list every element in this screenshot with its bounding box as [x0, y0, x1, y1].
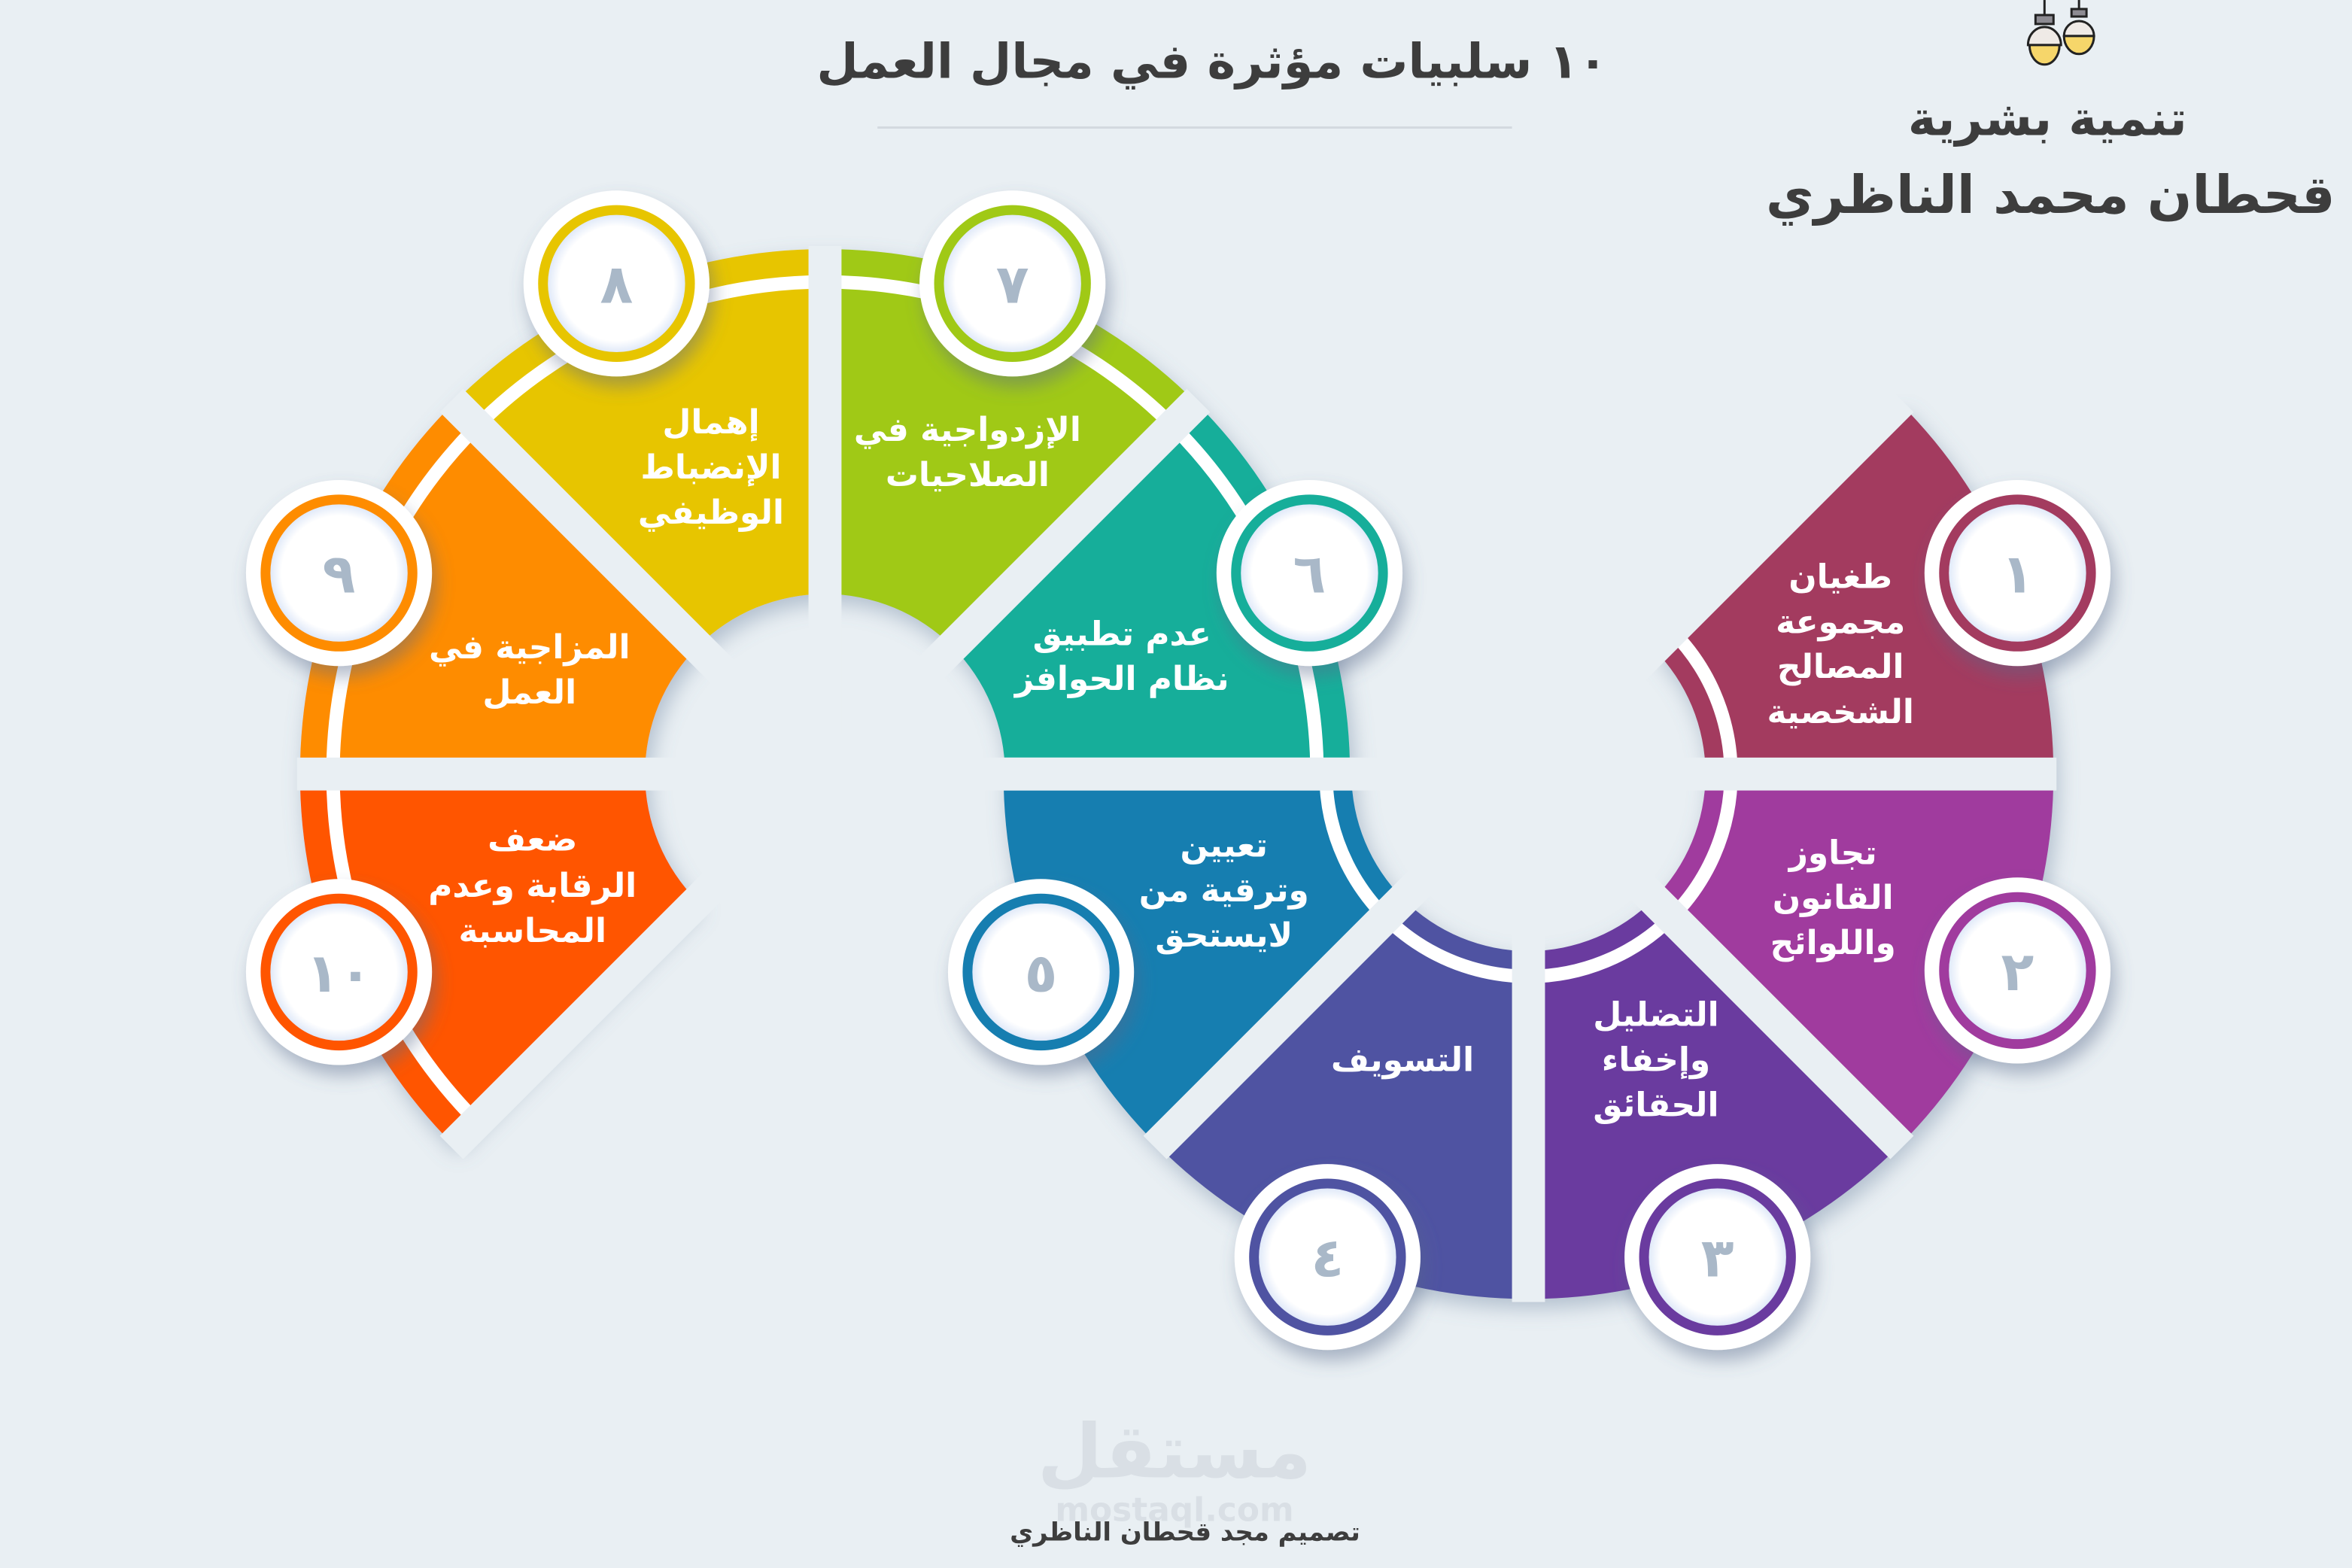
- label 6: نظام الحوافز: [1013, 660, 1229, 698]
- watermark: mostaql.com: [1055, 1491, 1294, 1530]
- segment 3: [1529, 899, 1900, 1299]
- badge 7: ٧: [996, 253, 1029, 316]
- label 3: التضليل: [1593, 996, 1719, 1035]
- label 9: المزاجية في: [429, 628, 631, 667]
- brand text: تنمية بشرية: [1908, 91, 2187, 147]
- segment 9: [300, 403, 697, 774]
- badge 9: ٩: [323, 542, 355, 606]
- label 3: وإخفاء: [1602, 1041, 1710, 1079]
- label 5: لايستحق: [1155, 916, 1293, 955]
- label 2: القانون: [1773, 879, 1894, 917]
- label 8: الوظيفي: [638, 494, 784, 532]
- badge 5: ٥: [1025, 941, 1057, 1004]
- label 1: مجموعة: [1776, 603, 1905, 641]
- badge 9: [246, 480, 432, 666]
- badge 6: ٦: [1293, 542, 1326, 606]
- badge 1: ١: [2001, 542, 2034, 606]
- label 10: المحاسبة: [458, 912, 606, 950]
- badge 1: [1925, 480, 2110, 666]
- label 7: الصلاحيات: [886, 456, 1050, 494]
- icon: lamps: [2028, 0, 2094, 65]
- badge 10: ١٠: [306, 941, 372, 1004]
- label 5: تعيين: [1181, 826, 1268, 865]
- label 6: عدم تطبيق: [1033, 615, 1211, 653]
- label 3: الحقائق: [1593, 1086, 1719, 1124]
- segment 2: [1654, 774, 2053, 1145]
- badge 2: [1925, 877, 2110, 1064]
- badge 8: [524, 190, 710, 376]
- credit: تصميم مجد قحطان الناظري: [1010, 1517, 1360, 1547]
- segment 10: [300, 774, 697, 1145]
- badge 7: [919, 190, 1105, 376]
- badge 4: ٤: [1311, 1226, 1344, 1290]
- watermark: مستقل: [1038, 1408, 1311, 1496]
- label 7: الإزدواجية في: [854, 411, 1081, 449]
- label 10: الرقابة وعدم: [428, 867, 637, 905]
- segment 6: [953, 403, 1350, 774]
- segment 7: [825, 249, 1196, 646]
- label 2: تجاوز: [1788, 834, 1877, 872]
- label 8: الإنضباط: [640, 448, 782, 487]
- segment 1: [1654, 403, 2053, 774]
- badge 5: [948, 879, 1134, 1065]
- brand block: [1766, 0, 2335, 226]
- label 8: إهمال: [662, 403, 760, 442]
- badge 6: [1217, 480, 1402, 666]
- segment 5: [1004, 774, 1403, 1145]
- segment 8: [454, 249, 825, 646]
- label 2: واللوائح: [1770, 924, 1896, 962]
- title: ١٠ سلبيات مؤثرة في مجال العمل: [816, 35, 1607, 90]
- label 9: العمل: [482, 673, 576, 712]
- badge 8: ٨: [600, 253, 633, 316]
- ring segments: [297, 246, 2056, 1302]
- label 5: وترقية من: [1139, 871, 1309, 910]
- badge 4: [1235, 1164, 1421, 1350]
- label 1: طغيان: [1788, 558, 1892, 597]
- label 1: الشخصية: [1767, 693, 1914, 731]
- badge 2: ٢: [2001, 940, 2034, 1003]
- label 1: المصالح: [1777, 648, 1904, 686]
- badge 10: [246, 879, 432, 1065]
- segment 4: [1157, 899, 1529, 1299]
- label 4: التسويف: [1331, 1041, 1474, 1079]
- badge 3: [1624, 1164, 1810, 1350]
- label 10: ضعف: [488, 820, 577, 858]
- badge 3: ٣: [1701, 1226, 1734, 1290]
- brand block: قحطان محمد الناظري: [1766, 165, 2335, 226]
